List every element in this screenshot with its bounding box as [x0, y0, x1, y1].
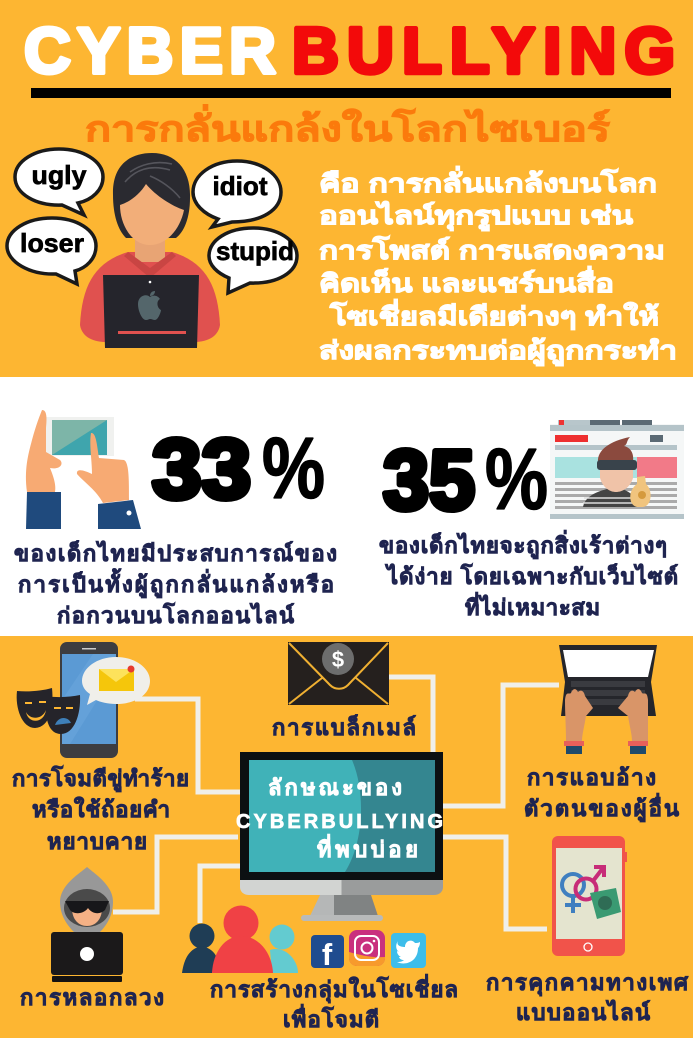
definition paragraph: คิดเห็น และแชร์บนสื่อ — [319, 266, 614, 298]
label: harassment: การโจมตีขู่ทำร้าย — [12, 765, 189, 793]
title divider bar — [31, 88, 671, 98]
label: social group attack: การสร้างกลุ่มในโซเชี่ยล — [210, 973, 458, 1004]
icon: group of people — [182, 906, 298, 973]
central monitor — [236, 752, 443, 921]
title: BULLYING — [292, 14, 675, 87]
label: harassment: หรือใช้ถ้อยคำ — [32, 796, 170, 822]
icon: hands holding tablet — [26, 410, 141, 529]
icon: facebook: f — [322, 937, 333, 972]
speech bubble: ugly — [15, 149, 103, 215]
icon: laptop with typing hands — [559, 645, 657, 754]
label: harassment — [12, 765, 189, 854]
stat: 35% — [383, 432, 548, 528]
speech bubble: stupid — [209, 228, 297, 293]
stat: 35%: % — [485, 432, 548, 528]
speech bubble: loser: loser — [20, 228, 84, 258]
label: harassment: หยาบคาย — [47, 829, 147, 854]
definition paragraph: ส่งผลกระทบต่อผู้ถูกกระทำ — [319, 337, 677, 367]
monitor heading: ที่พบบ่อย — [317, 833, 418, 862]
stat 35% description: ได้ง่าย โดยเฉพาะกับเว็บไซต์ — [385, 562, 678, 589]
label: impersonation — [524, 765, 679, 823]
definition paragraph: ออนไลน์ทุกรูปแบบ เช่น — [319, 200, 633, 232]
icon: theatre masks — [17, 688, 80, 734]
label: deception: การหลอกลวง — [20, 985, 164, 1010]
speech bubble: idiot: idiot — [212, 171, 268, 201]
icon: apple logo — [138, 291, 161, 320]
speech bubble: loser — [7, 218, 96, 284]
definition paragraph — [319, 166, 677, 367]
subtitle: การกลั่นแกล้งในโลกไซเบอร์ — [85, 104, 610, 149]
stat: 33% — [152, 421, 325, 517]
stat 33% description: ก่อกวนบนโลกออนไลน์ — [57, 602, 294, 628]
icon: twitter — [391, 933, 426, 968]
definition paragraph: โซเชี่ยลมีเดียต่างๆ ทำให้ — [329, 299, 659, 331]
label: blackmail: การแบล็กเมล์ — [272, 713, 416, 740]
panel: forms background — [0, 636, 693, 1038]
label: impersonation: การแอบอ้าง — [527, 765, 656, 790]
monitor heading: ลักษณะของ — [268, 775, 402, 800]
panel: top background — [0, 0, 693, 377]
connector lines — [113, 677, 559, 929]
speech bubble: stupid: stupid — [216, 236, 294, 266]
icon: website with thief — [550, 420, 684, 519]
label: sexual harassment — [486, 970, 689, 1025]
definition paragraph: การโพสต์ การแสดงความ — [319, 235, 665, 265]
monitor heading: CYBERBULLYING — [236, 811, 443, 833]
icon: hacker with laptop — [51, 867, 123, 982]
label: sexual harassment: การคุกคามทางเพศ — [486, 970, 689, 997]
label: sexual harassment: แบบออนไลน์ — [516, 999, 650, 1025]
label: impersonation: ตัวตนของผู้อื่น — [524, 792, 679, 823]
definition paragraph: คือ การกลั่นแกล้งบนโลก — [319, 166, 657, 198]
stat: 33%: % — [262, 421, 325, 517]
icon: facebook — [311, 935, 344, 972]
icon: red phone with gender symbols — [552, 836, 627, 956]
stat 35% description: ของเด็กไทยจะถูกสิ่งเร้าต่างๆ — [379, 529, 667, 560]
title: CYBER — [24, 14, 276, 87]
stat 35% description: ที่ไม่เหมาะสม — [465, 591, 600, 620]
stat: 35%: 35 — [383, 433, 475, 527]
title — [24, 14, 675, 87]
speech bubble: ugly: ugly — [32, 160, 87, 190]
icon: phone with message and masks — [17, 642, 150, 758]
icon: blackmail envelope: $ — [332, 647, 344, 672]
monitor heading — [236, 775, 443, 862]
icon: instagram — [349, 930, 385, 966]
speech bubble: idiot — [193, 161, 281, 227]
label: social group attack — [210, 973, 458, 1032]
stat 33% description: การเป็นทั้งผู้ถูกกลั่นแกล้งหรือ — [18, 568, 334, 599]
icon: blackmail envelope — [288, 642, 389, 705]
stat 35% description — [379, 529, 678, 620]
stat 33% description — [14, 539, 337, 628]
label: social group attack: เพื่อโจมตี — [283, 1003, 379, 1032]
stat: 33%: 33 — [152, 422, 251, 516]
illustration: person with laptop — [80, 153, 220, 348]
stat 33% description: ของเด็กไทยมีประสบการณ์ของ — [14, 539, 337, 566]
panel: stats background — [0, 377, 693, 636]
